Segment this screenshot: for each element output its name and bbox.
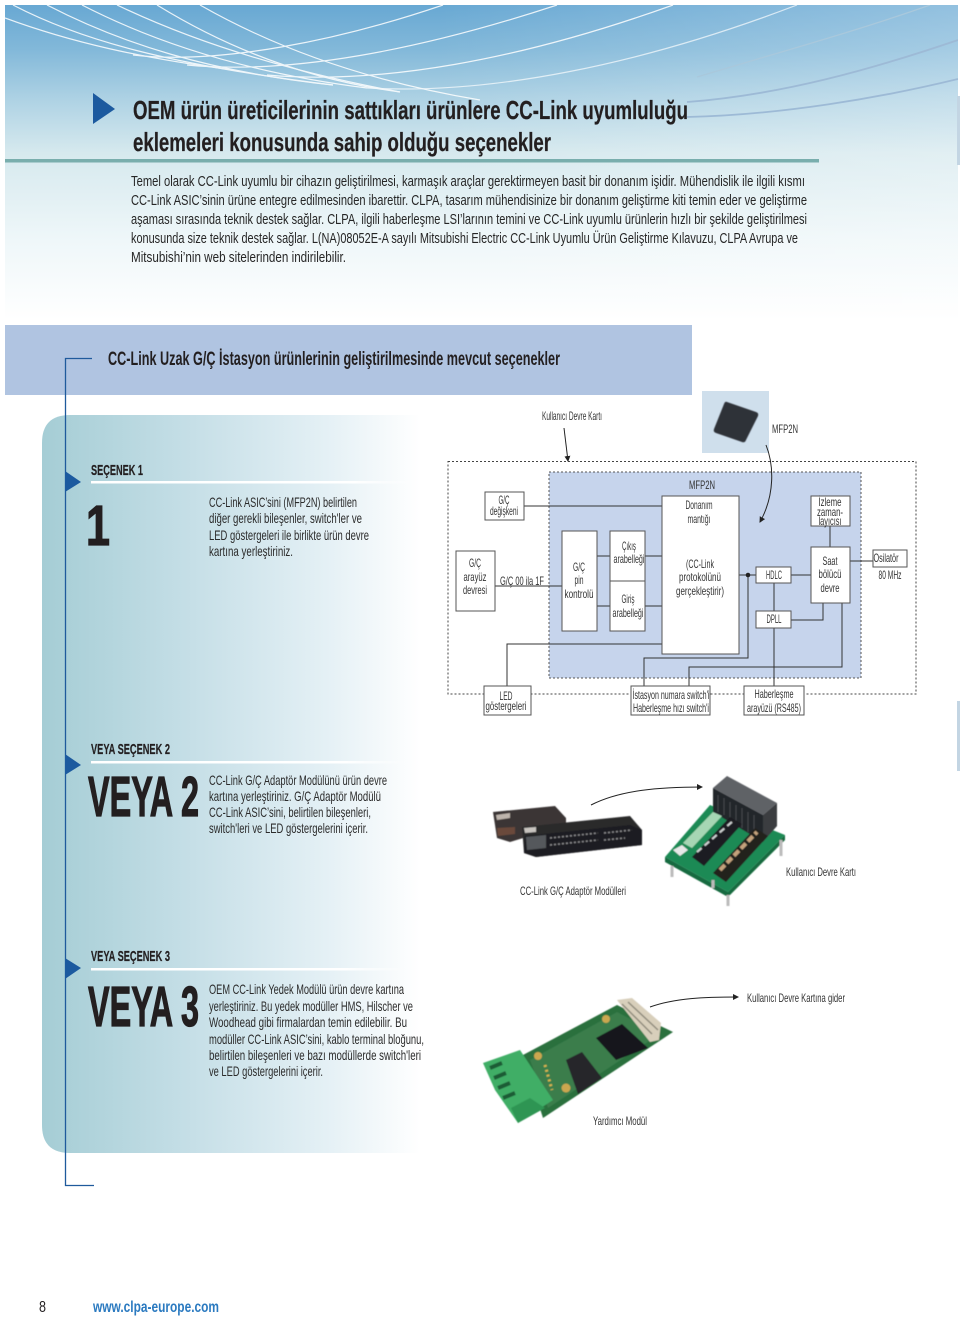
box: G/Ç arayüz devresi: arayüz: [464, 570, 486, 584]
box: G/Ç pin kontrolü: G/Ç: [573, 560, 585, 574]
footer url: www.clpa-europe.com: [92, 1299, 219, 1316]
label: Kullanıcı Devre Kartına gider: Kullanıcı Devre Kartına gider: [747, 991, 845, 1005]
box: G/Ç pin kontrolü: pin: [574, 573, 584, 587]
box: G/Ç arayüz devresi: G/Ç: [469, 556, 481, 570]
option 1: CC-Link ASIC’sini (MFP2N) belirtilen: [209, 494, 357, 510]
box: Donanım mantığı: (CC-Link: [686, 557, 715, 571]
box: arabellek: arabelleği: [612, 606, 644, 620]
box: İzleme zamanlayıcısı: İzleme: [818, 495, 842, 509]
title: OEM ürün üreticilerinin sattıkları ürünlere CC-Link uyumluluğu: [133, 95, 688, 125]
box: LED göstergeleri: LED: [500, 689, 513, 703]
box: arabellek: Çıkış: [622, 539, 636, 553]
box: G/Ç pin kontrolü: kontrolü: [564, 587, 594, 601]
intro text block: [131, 173, 807, 266]
label: CC-Link G/Ç Adaptör Modülleri: CC-Link G/Ç Adaptör Modülleri: [520, 884, 626, 898]
photo: auxiliary module: [483, 998, 673, 1123]
box: switch: Haberleşme hızı switch'i: [633, 701, 709, 715]
option 2: kartına yerleştiriniz. G/Ç Adaptör Modülü: [209, 788, 381, 804]
option 3: yerleştiriniz. Bu yedek modüller HMS, Hilscher ve: [209, 998, 413, 1014]
label: MFP2N: MFP2N: [772, 422, 798, 436]
box: HDLC: HDLC: [766, 568, 782, 582]
footer page number: 8: [39, 1299, 46, 1316]
box: Donanım mantığı: Donanım: [686, 498, 712, 512]
option 2: [65, 741, 411, 836]
option 3: Woodhead gibi firmalardan temin edilebilir. Bu: [209, 1014, 407, 1030]
edge marks: [957, 96, 960, 165]
photo: adapter modules: [493, 806, 642, 857]
label: Kullanıcı Devre Kartı: Kullanıcı Devre Kartı: [542, 409, 602, 423]
header background with curves: [5, 5, 958, 280]
box: LED göstergeleri: göstergeleri: [486, 699, 526, 713]
intro text block: Mitsubishi’nin web sitelerinden indirilebilir.: [131, 249, 346, 266]
box: Saat bölücü devre: bölücü: [818, 567, 842, 581]
title arrow icon: [93, 93, 115, 124]
arrow: module to user board: [650, 997, 738, 1007]
box: Donanım mantığı: protokolünü: [679, 570, 721, 584]
box: switch: [631, 686, 710, 715]
arrow: adapter to board: [591, 787, 702, 805]
box: G/Ç arayüz devresi: [456, 551, 495, 611]
box: DPLL: DPLL: [766, 612, 782, 626]
bracket line: [66, 358, 94, 1186]
panel: section heading band: CC-Link Uzak G/Ç İstasyon ürünlerinin geliştirilmesinde mevcut seçenekler: [108, 349, 560, 370]
label: MFP2N: MFP2N: [689, 478, 715, 492]
connection lines: [495, 506, 873, 686]
box: Saat bölücü devre: [811, 547, 850, 603]
box: G/Ç değişkeni: değişkeni: [490, 504, 518, 518]
panel: options background: [42, 415, 420, 1153]
option 2: VEYA SEÇENEK 2: [91, 741, 170, 758]
label: Yardımcı Modül: Yardımcı Modül: [593, 1114, 647, 1128]
box: Saat bölücü devre: devre: [820, 581, 840, 595]
box: Haberleşme arayüzü: Haberleşme: [754, 687, 794, 701]
option 3: [65, 948, 424, 1079]
box: Donanım mantığı: mantığı: [688, 512, 710, 526]
panel: section heading band: [5, 325, 692, 395]
box: Osilatör: [873, 550, 907, 567]
box: arabellek: arabelleği: [614, 552, 644, 566]
box: G/Ç pin kontrolü: [562, 531, 597, 631]
box: Haberleşme arayüzü: arayüzü (RS485): [747, 701, 801, 715]
title: eklemeleri konusunda sahip olduğu seçenekler: [133, 127, 551, 157]
title: [93, 93, 688, 157]
box: Donanım mantığı: [662, 496, 739, 654]
option 2: VEYA 2: [88, 765, 199, 829]
label: Kullanıcı Devre Kartı: Kullanıcı Devre Kartı: [786, 865, 856, 879]
box: İzleme zamanlayıcısı: layıcısı: [818, 514, 842, 528]
box: switch: İstasyon numara switch'i: [632, 688, 710, 702]
box: Donanım mantığı: gerçekleştirir): [676, 584, 724, 598]
option 1: kartına yerleştiriniz.: [209, 543, 293, 559]
option 2: CC-Link ASIC’sini, belirtilen bileşenleri,: [209, 804, 371, 820]
option 3: belirtilen bileşenleri ve bazı modüllerde switch'leri: [209, 1047, 421, 1063]
option 1: LED göstergeleri ile birlikte ürün devre: [209, 527, 369, 543]
option 3: ve LED göstergelerini içerir.: [209, 1063, 323, 1079]
label: 80 MHz: 80 MHz: [878, 568, 902, 582]
box: G/Ç arayüz devresi: devresi: [463, 583, 487, 597]
option 2: CC-Link G/Ç Adaptör Modülünü ürün devre: [209, 772, 387, 788]
arrow: to user board: [564, 428, 568, 461]
MFP2N blue area: [549, 472, 861, 678]
box: G/Ç değişkeni: G/Ç: [498, 493, 510, 507]
option 3: OEM CC-Link Yedek Modülü ürün devre kartına: [209, 981, 404, 997]
option 1: SEÇENEK 1: [91, 462, 143, 479]
option 1: [65, 462, 421, 559]
box: G/Ç değişkeni: [485, 492, 524, 520]
box: arabellek: [610, 531, 645, 631]
box: Osilatör: Osilatör: [874, 551, 899, 565]
icon: MFP2N chip photo: [702, 391, 769, 453]
box: DPLL: [756, 611, 791, 628]
option 2: switch'leri ve LED göstergelerini içerir.: [209, 820, 368, 836]
box: İzleme zamanlayıcısı: [811, 495, 850, 528]
box: LED göstergeleri: [484, 686, 531, 715]
box: HDLC: [756, 567, 791, 583]
box: arabellek: Giriş: [622, 592, 634, 606]
user board dotted frame: [448, 462, 916, 694]
photo: user circuit board: [665, 776, 785, 906]
option 1: 1: [86, 494, 110, 558]
box: İzleme zamanlayıcısı: zaman-: [817, 505, 843, 519]
junction dot: [746, 573, 750, 577]
label: G/Ç 00 ila 1F: G/Ç 00 ila 1F: [500, 574, 544, 588]
option 3: VEYA 3: [88, 975, 199, 1039]
option 1: diğer gerekli bileşenler, switch'ler ve: [209, 510, 362, 526]
box: Haberleşme arayüzü: [744, 686, 804, 715]
block diagram: [448, 462, 916, 715]
arrow: chip to MFP2N block: [760, 445, 772, 522]
option 3: modüller CC-Link ASIC’sini, kablo terminal bloğunu,: [209, 1031, 424, 1047]
box: Saat bölücü devre: Saat: [822, 554, 838, 568]
option 3: VEYA SEÇENEK 3: [91, 948, 170, 965]
